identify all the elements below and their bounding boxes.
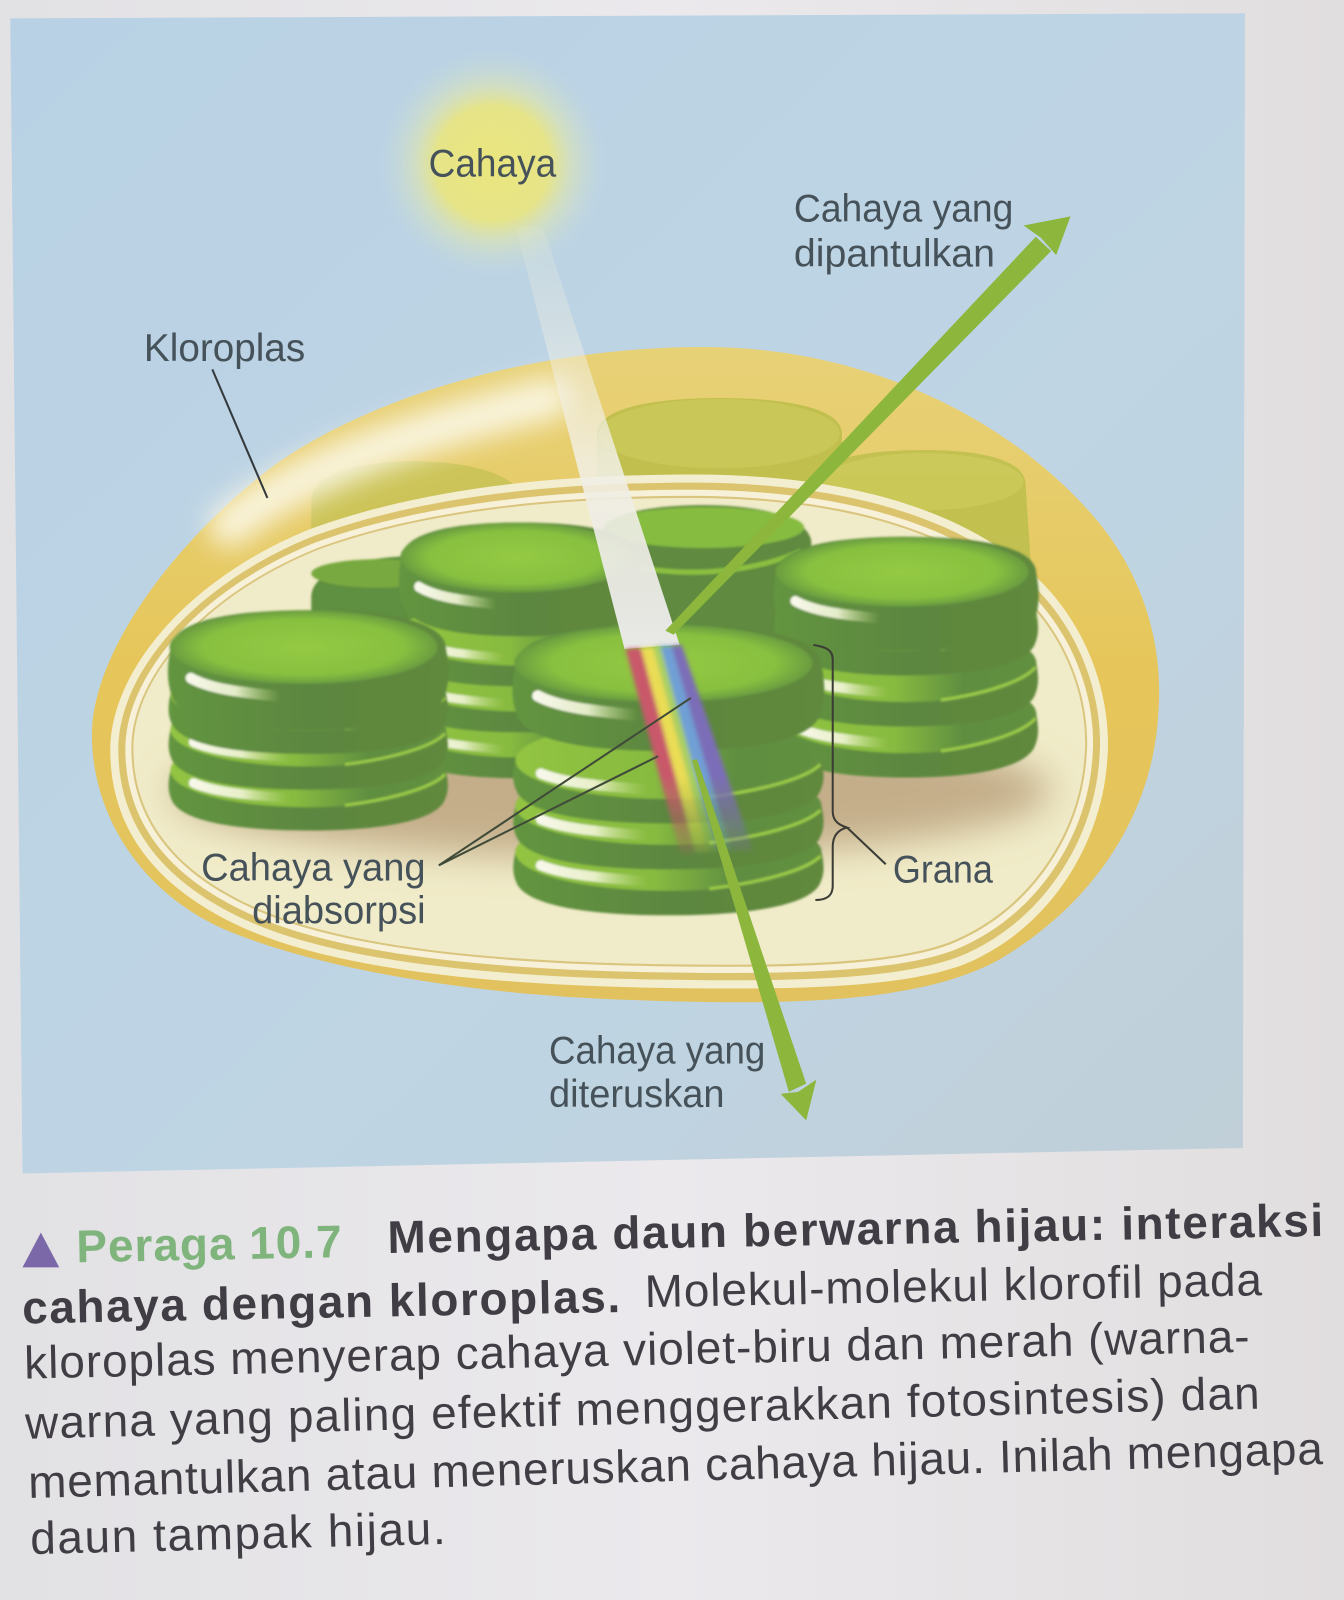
arrow: transmitted light (692, 759, 816, 1120)
light beam (515, 227, 680, 649)
label: Cahaya yang dipantulkan: Cahaya yang (794, 187, 1013, 230)
caption title line 2: cahaya dengan kloroplas. (22, 1270, 621, 1333)
caption body line 5: memantulkan atau meneruskan cahaya hijau. Inilah mengapa (28, 1422, 1324, 1508)
label: Cahaya: Cahaya (429, 143, 557, 186)
caption title line 1: Mengapa daun berwarna hijau: interaksi (387, 1194, 1324, 1263)
grana: right stack (774, 537, 1039, 778)
grana: rear centre stack (602, 505, 811, 653)
grana: rear left stack (311, 556, 480, 714)
bracket: grana (813, 645, 886, 900)
chloroplast inner membrane (110, 474, 1108, 989)
panel: chloroplast outer envelope (92, 347, 1159, 1002)
icon: purple triangle (23, 1233, 59, 1267)
caption (22, 1194, 1324, 1564)
glow on envelope (230, 398, 551, 526)
grana: back centre stack (399, 522, 642, 778)
stroma shadow (174, 724, 1051, 857)
caption body line 4: warna yang paling efektif menggerakkan fotosintesis) dan (24, 1367, 1260, 1449)
icon: sun glow (379, 49, 607, 278)
label: Cahaya yang diteruskan (549, 1029, 765, 1116)
label: Cahaya yang diabsorpsi: Cahaya yang (201, 847, 426, 890)
label: Cahaya yang diteruskan: diteruskan (549, 1073, 725, 1116)
grana: left stack (168, 610, 449, 831)
leader line: chloroplast (212, 369, 267, 498)
label: Cahaya yang dipantulkan: dipantulkan (794, 232, 995, 275)
figure number: Peraga 10.7 (76, 1215, 342, 1272)
label: Cahaya yang dipantulkan (794, 187, 1013, 275)
caption body line 2: Molekul-molekul klorofil pada (644, 1253, 1263, 1317)
ghost grana seen through envelope (311, 398, 1033, 592)
label: Grana: Grana (893, 849, 993, 892)
label: Kloroplas: Kloroplas (144, 327, 305, 370)
caption body line 3: kloroplas menyerap cahaya violet-biru dan merah (warna- (24, 1310, 1250, 1389)
arrow: reflected light (665, 216, 1070, 635)
panel: blue illustration background (10, 13, 1245, 1173)
grana: central stack (513, 624, 824, 915)
label: Cahaya yang diabsorpsi: diabsorpsi (252, 889, 426, 932)
rainbow absorbed spectrum (626, 645, 753, 855)
label: Cahaya yang diteruskan: Cahaya yang (549, 1029, 765, 1072)
caption body line 6: daun tampak hijau. (30, 1502, 446, 1564)
leader lines: absorbed light (439, 698, 691, 865)
label: Cahaya yang diabsorpsi (201, 847, 426, 932)
